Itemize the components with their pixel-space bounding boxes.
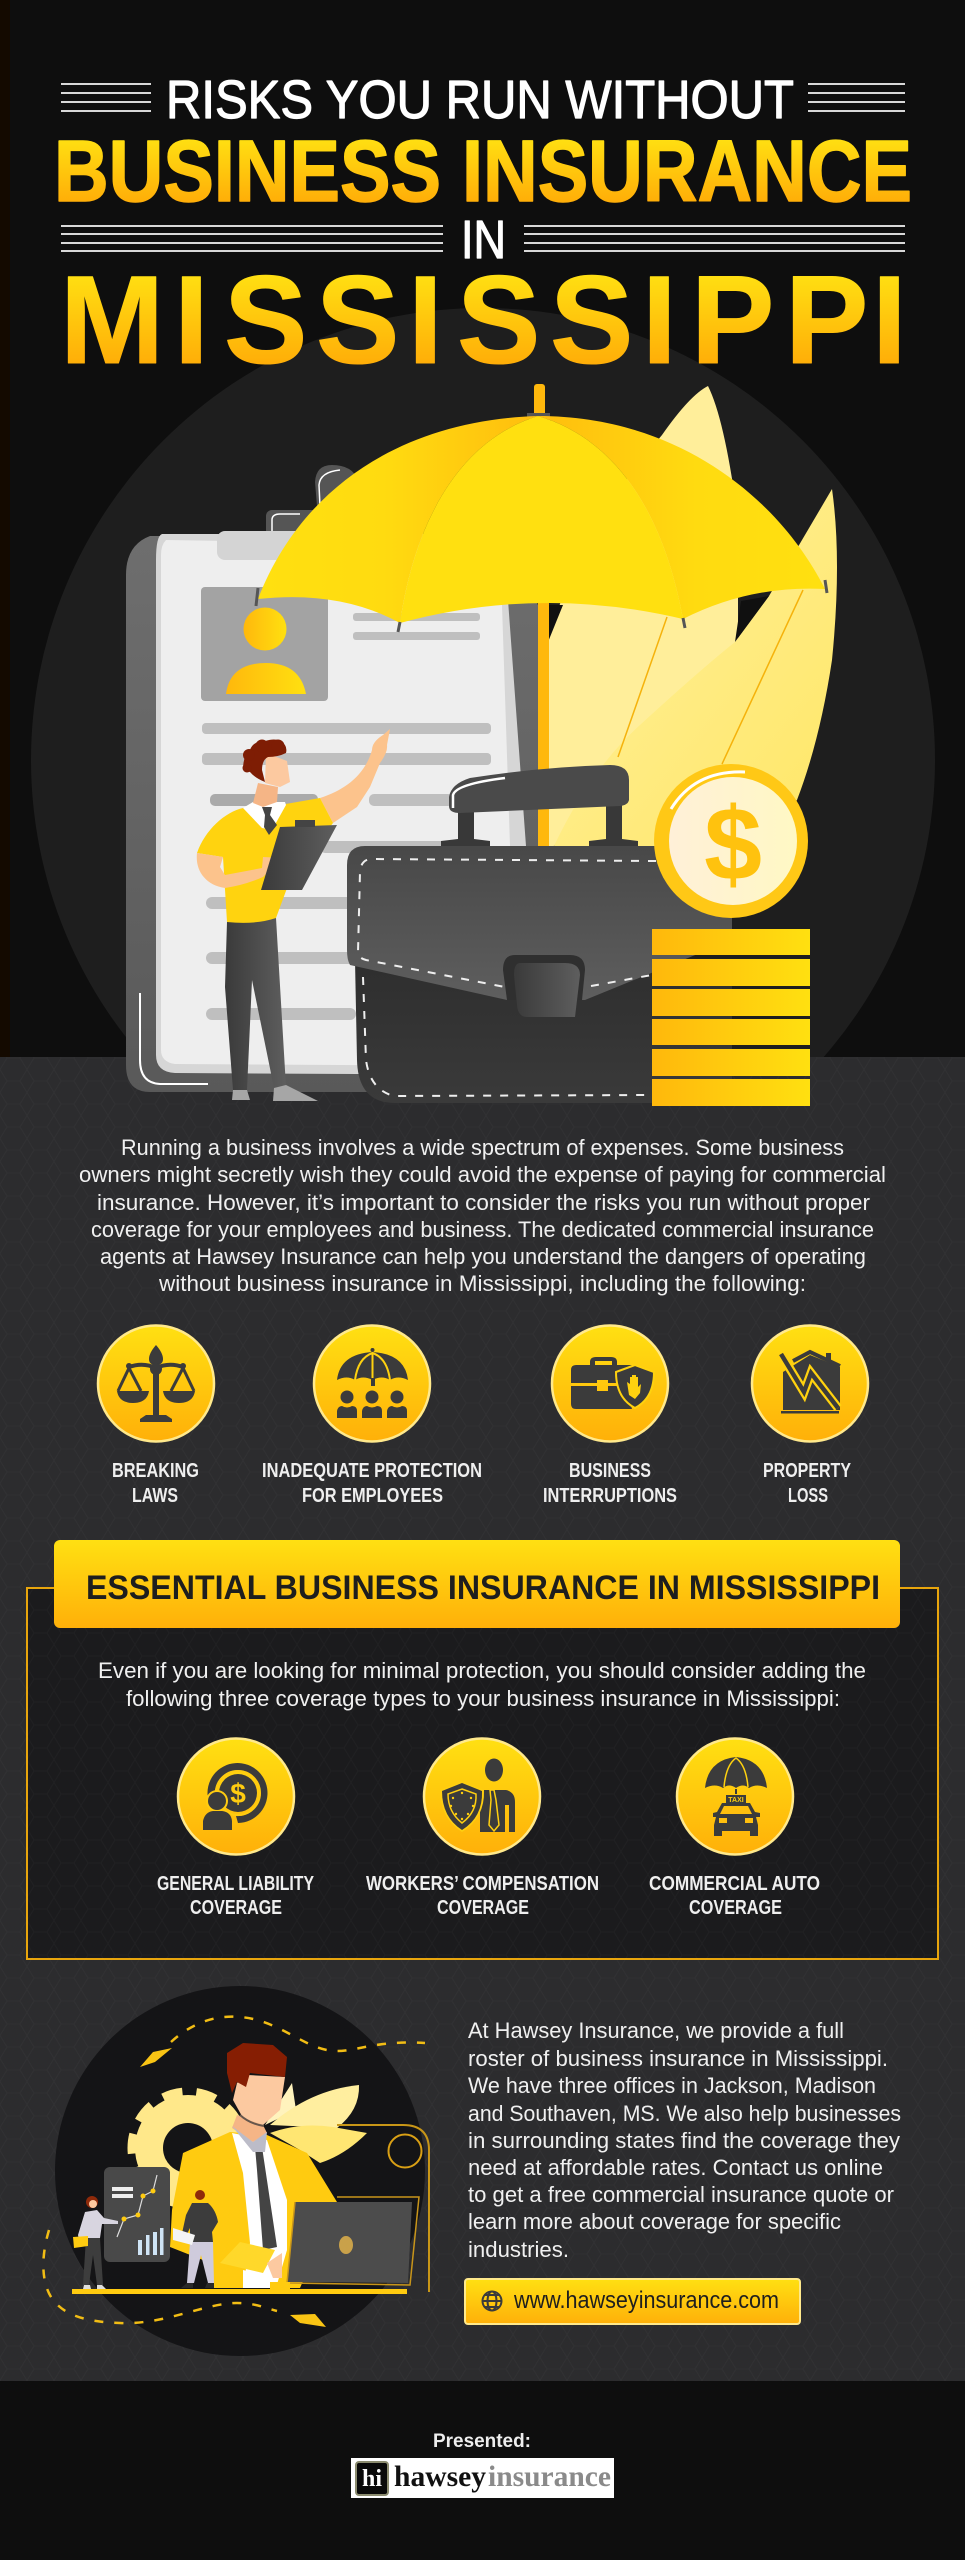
chart board [104, 2167, 170, 2262]
umbrella pole [538, 600, 549, 850]
small man viewer [173, 2190, 218, 2288]
logo badge: hi [362, 2466, 382, 2492]
label: business interruptions [543, 1460, 677, 1507]
briefcase stitching [358, 859, 656, 1096]
logo [351, 2458, 614, 2498]
jacket [170, 2132, 337, 2288]
label: general liability [157, 1873, 315, 1919]
clipboard clip [266, 510, 326, 540]
desk [72, 2289, 407, 2294]
beard line [240, 2115, 264, 2126]
umbrella [256, 384, 827, 850]
risk: breaking laws [98, 1326, 214, 1507]
canopy centre panel [400, 416, 683, 623]
neck [253, 783, 278, 807]
heading banner: ESSENTIAL BUSINESS INSURANCE IN MISSISSIPPI [86, 1569, 880, 1607]
label: business interruptions: BUSINESS [569, 1460, 651, 1482]
small woman presenter [73, 2196, 118, 2289]
textured grey section [0, 1057, 965, 2381]
tie [262, 807, 277, 835]
title [54, 70, 912, 390]
label: commercial auto: COVERAGE [689, 1897, 782, 1919]
photo box [201, 587, 328, 701]
man with clipboard [197, 729, 390, 1101]
phone outline [337, 2125, 429, 2292]
briefcase lower body [355, 960, 732, 1103]
title line 4: MISSISSIPPI [60, 251, 907, 390]
shoes [232, 1085, 318, 1101]
left edge strip [0, 0, 10, 1057]
intro paragraph: without business insurance in Mississippi, including the following: [158, 1271, 806, 1296]
briefcase flap [347, 846, 732, 1000]
label: workers compensation: COVERAGE [437, 1897, 529, 1919]
leaves behind umbrella [548, 386, 837, 850]
about paragraph: At Hawsey Insurance, we provide a full [468, 2018, 844, 2043]
photo person [226, 608, 306, 694]
footer [0, 2381, 965, 2560]
about paragraph [468, 2018, 901, 2262]
intro paragraph [79, 1135, 886, 1296]
coverage intro text: Even if you are looking for minimal protection, you should consider adding the [98, 1658, 866, 1683]
backdrop circle [55, 1986, 425, 2356]
title stripes right top [808, 83, 905, 112]
hero illustration [126, 384, 837, 1106]
label: breaking laws: BREAKING [112, 1460, 199, 1482]
canopy left panel [258, 416, 538, 623]
label: property loss [763, 1460, 852, 1507]
clipboard hook [315, 465, 358, 510]
label: property loss: PROPERTY [763, 1460, 852, 1482]
dashed flight path top [171, 2017, 425, 2051]
trousers [225, 918, 286, 1090]
clipboard document [126, 465, 541, 1092]
dollar sign: $ [704, 787, 762, 903]
coverage: general liability [157, 1738, 315, 1919]
risk: business interruptions [543, 1326, 677, 1507]
icon: coin and person [203, 1763, 267, 1830]
briefcase [347, 765, 732, 1103]
risk: property loss [752, 1326, 868, 1507]
briefcase clasp [503, 955, 585, 1000]
about paragraph: to get a free commercial insurance quote or [468, 2182, 894, 2207]
coin stack [652, 929, 810, 1106]
briefcase handle [441, 800, 638, 847]
icon: umbrella over people [337, 1348, 408, 1418]
risk: inadequate protection [262, 1326, 482, 1507]
logo wordmark grey: insurance [488, 2460, 611, 2493]
document lines [202, 613, 491, 1020]
taxi sign: TAXI [728, 1797, 744, 1804]
about paragraph: need at affordable rates. Contact us online [468, 2155, 883, 2180]
label: commercial auto [649, 1873, 820, 1919]
collar [243, 802, 286, 830]
about paragraph: in surrounding states find the coverage they [468, 2128, 900, 2153]
paper plane top [140, 2048, 172, 2067]
title stripes right middle [524, 225, 905, 252]
about paragraph: industries. [468, 2237, 569, 2262]
umbrella tips [256, 580, 827, 632]
intro paragraph: coverage for your employees and business. The dedicated commercial insurance [91, 1217, 874, 1242]
umbrella spike [534, 384, 545, 418]
hair [242, 740, 286, 782]
icon: coin and person: $ [230, 1778, 246, 1809]
label: workers compensation: WORKERS’ COMPENSATION [366, 1873, 599, 1895]
cuff [220, 2242, 275, 2273]
gear [132, 2092, 244, 2204]
title stripes left middle [61, 225, 443, 252]
paper plane bottom [290, 2314, 326, 2327]
face [233, 2075, 285, 2125]
icon: house with falling arrow [781, 1352, 840, 1414]
title line 1: RISKS YOU RUN WITHOUT [166, 70, 794, 130]
logo wordmark dark: hawsey [394, 2460, 486, 2493]
title word in: IN [461, 210, 506, 270]
neck [232, 2115, 267, 2142]
logo badge [356, 2462, 388, 2495]
about paragraph: and Southaven, MS. We also help businesses [468, 2101, 901, 2126]
clipboard back [126, 536, 541, 1092]
about paragraph: learn more about coverage for specific [468, 2209, 841, 2234]
intro paragraph: owners might secretly wish they could avoid the expense of paying for commercial [79, 1162, 886, 1187]
coverage: workers compensation [366, 1738, 599, 1919]
hair [227, 2043, 287, 2093]
panel: essential business insurance [27, 1540, 938, 1959]
held clipboard [261, 825, 337, 890]
website button [465, 2279, 800, 2324]
label: commercial auto: COMMERCIAL AUTO [649, 1873, 820, 1895]
leaves [265, 2083, 367, 2163]
about paragraph: We have three offices in Jackson, Madison [468, 2073, 876, 2098]
intro paragraph: Running a business involves a wide spectrum of expenses. Some business [121, 1135, 844, 1160]
coin [654, 764, 808, 918]
dashed flight path bottom [43, 2230, 277, 2323]
icon: scales of justice [117, 1345, 195, 1422]
clip base [217, 531, 327, 560]
label: general liability: GENERAL LIABILITY [157, 1873, 315, 1895]
heading banner [54, 1540, 900, 1628]
intro paragraph: insurance. However, it’s important to consider the risks you run without proper [97, 1190, 870, 1215]
icon: globe [482, 2292, 502, 2310]
label: general liability: COVERAGE [190, 1897, 282, 1919]
collar [232, 2126, 267, 2152]
label: breaking laws [112, 1460, 199, 1507]
coverage: commercial auto [649, 1738, 820, 1919]
hero backdrop circle [31, 308, 935, 1212]
presented label: Presented: [433, 2431, 531, 2452]
hand [267, 2253, 282, 2278]
icon: shield and worker [440, 1758, 515, 1832]
bent arm [197, 853, 285, 888]
shirt [232, 2133, 287, 2288]
shirt [197, 798, 333, 923]
raised arm [320, 729, 390, 823]
office illustration [43, 1986, 429, 2356]
label: business interruptions: INTERRUPTIONS [543, 1485, 677, 1507]
label: workers compensation [366, 1873, 599, 1919]
canopy right panel [538, 416, 825, 619]
paper [161, 540, 510, 1066]
icon: briefcase and shield [571, 1357, 654, 1409]
label: inadequate protection: INADEQUATE PROTECTION [262, 1460, 482, 1482]
intro paragraph: agents at Hawsey Insurance can help you understand the dangers of operating [100, 1244, 866, 1269]
about paragraph: roster of business insurance in Mississippi. [468, 2046, 888, 2071]
label: breaking laws: LAWS [132, 1485, 178, 1507]
icon: umbrella over taxi [705, 1757, 767, 1836]
label: inadequate protection [262, 1460, 482, 1507]
website address: www.hawseyinsurance.com [513, 2287, 779, 2314]
title stripes left top [61, 83, 151, 112]
label: inadequate protection: FOR EMPLOYEES [302, 1485, 443, 1507]
businessman [170, 2043, 337, 2288]
tie [255, 2147, 277, 2250]
face [265, 753, 290, 787]
coverage intro text [98, 1658, 866, 1711]
label: property loss: LOSS [788, 1485, 828, 1507]
coverage intro text: following three coverage types to your business insurance in Mississippi: [126, 1686, 840, 1711]
paper edge [156, 534, 526, 1075]
laptop [287, 2197, 419, 2285]
